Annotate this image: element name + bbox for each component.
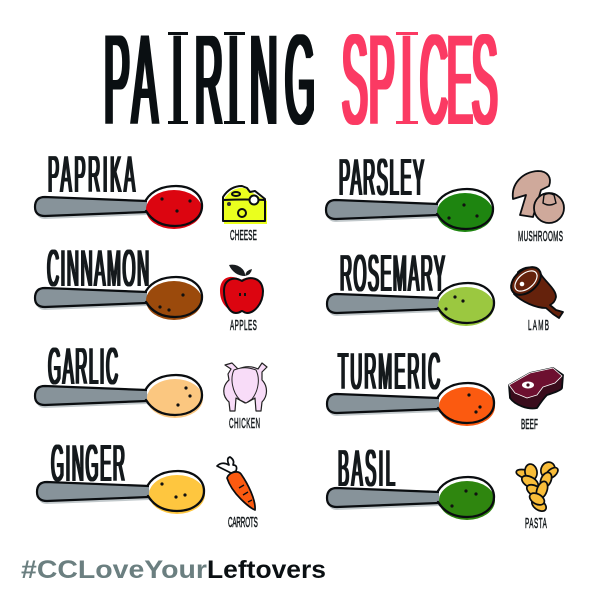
label: mushrooms: MUSHROOMS	[518, 229, 563, 245]
icon: cheese	[223, 186, 267, 224]
spice name: parsley: PARSLEY	[339, 149, 424, 207]
title: PAIRING	[104, 9, 315, 152]
label: chicken: CHICKEN	[229, 416, 260, 432]
label: beef: BEEF	[521, 417, 538, 433]
icon: pasta	[515, 460, 560, 514]
label: cheese: CHEESE	[230, 228, 257, 244]
spice name: paprika: PAPRIKA	[48, 146, 135, 204]
icon: apple	[220, 265, 263, 313]
spice name: cinnamon: CINNAMON	[47, 240, 149, 298]
label: lamb: LAMB	[528, 318, 549, 334]
spice name: garlic: GARLIC	[48, 338, 118, 396]
spice row: cinnamon	[35, 240, 263, 334]
spice name: ginger: GINGER	[51, 435, 125, 493]
spoon: paprika	[35, 186, 202, 229]
spoon: basil	[327, 477, 495, 520]
icon: chicken	[224, 363, 267, 411]
spice row: garlic	[35, 338, 267, 432]
label: apples: APPLES	[230, 318, 257, 334]
spice row: parsley	[326, 149, 564, 245]
label: pasta: PASTA	[525, 516, 547, 532]
spoon: parsley	[326, 189, 493, 232]
hashtag: Leftovers	[207, 556, 326, 584]
title	[104, 9, 498, 152]
hashtag	[21, 556, 326, 584]
title: SPICES	[342, 9, 498, 152]
icon: beef	[509, 368, 563, 408]
spoon: garlic	[35, 375, 203, 418]
icon: mushrooms	[513, 171, 564, 223]
spice name: basil: BASIL	[338, 440, 395, 498]
spice name: turmeric: TURMERIC	[338, 343, 440, 401]
spoon: ginger	[37, 471, 205, 514]
spoon: rosemary	[327, 283, 494, 326]
spice row: turmeric	[327, 343, 563, 433]
spoon: cinnamon	[35, 277, 202, 320]
spice name: rosemary: ROSEMARY	[340, 245, 445, 303]
icon: lamb	[506, 262, 563, 318]
spice row: basil	[327, 440, 560, 532]
spice row: rosemary	[327, 245, 563, 334]
spice row: paprika	[35, 146, 267, 244]
label: carrots: CARROTS	[228, 515, 258, 531]
spoon: turmeric	[327, 383, 495, 426]
spice row: ginger	[37, 435, 258, 531]
hashtag: #CCLoveYour	[21, 556, 207, 584]
icon: carrot	[217, 457, 255, 510]
